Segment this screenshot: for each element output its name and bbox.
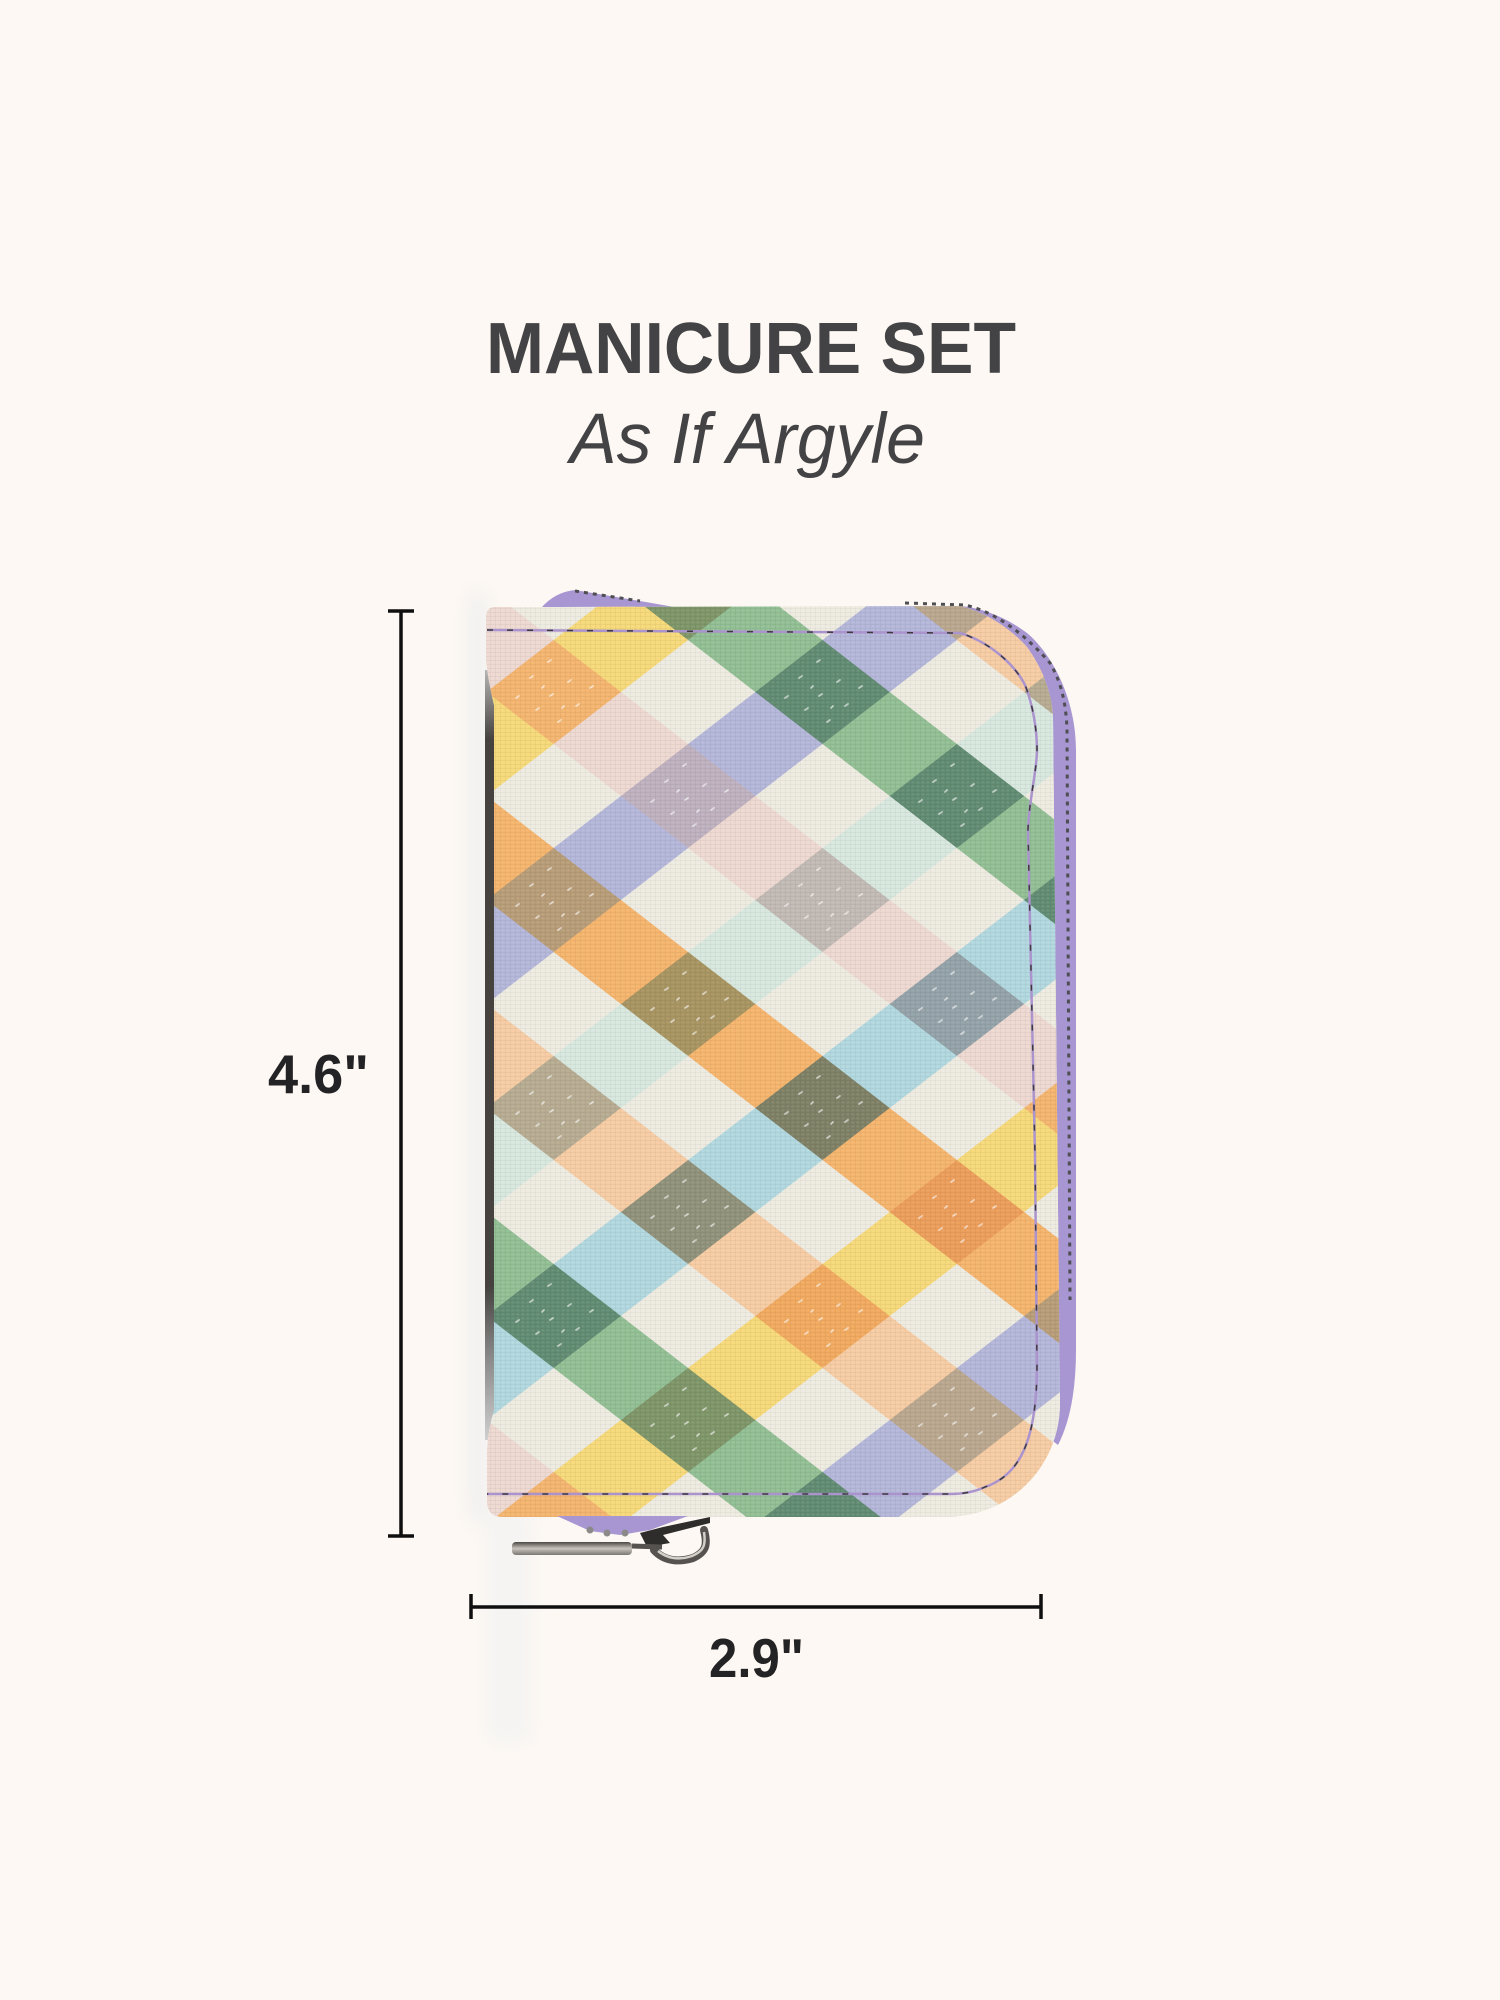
stitching: [487, 630, 1037, 1494]
width dimension bracket: [471, 1594, 1041, 1619]
zipper pull: [512, 1517, 710, 1560]
subtitle: As If Argyle: [566, 400, 925, 479]
title: MANICURE SET: [486, 309, 1016, 389]
wall shadow beside and below the pouch: [468, 592, 532, 1743]
stitching shadow dashes: [487, 630, 1037, 1494]
height label: 4.6": [268, 1043, 369, 1105]
width label: 2.9": [709, 1627, 804, 1689]
dark spine edge: [485, 670, 497, 1440]
zipper teeth: [575, 591, 1070, 1300]
gingham pouch body: [486, 606, 1060, 1517]
lavender zipper tape: [541, 590, 1076, 1445]
zipper tab under the pouch: [557, 1516, 688, 1535]
height dimension bracket: [388, 611, 414, 1536]
product: manicure set pouch: [485, 590, 1076, 1564]
